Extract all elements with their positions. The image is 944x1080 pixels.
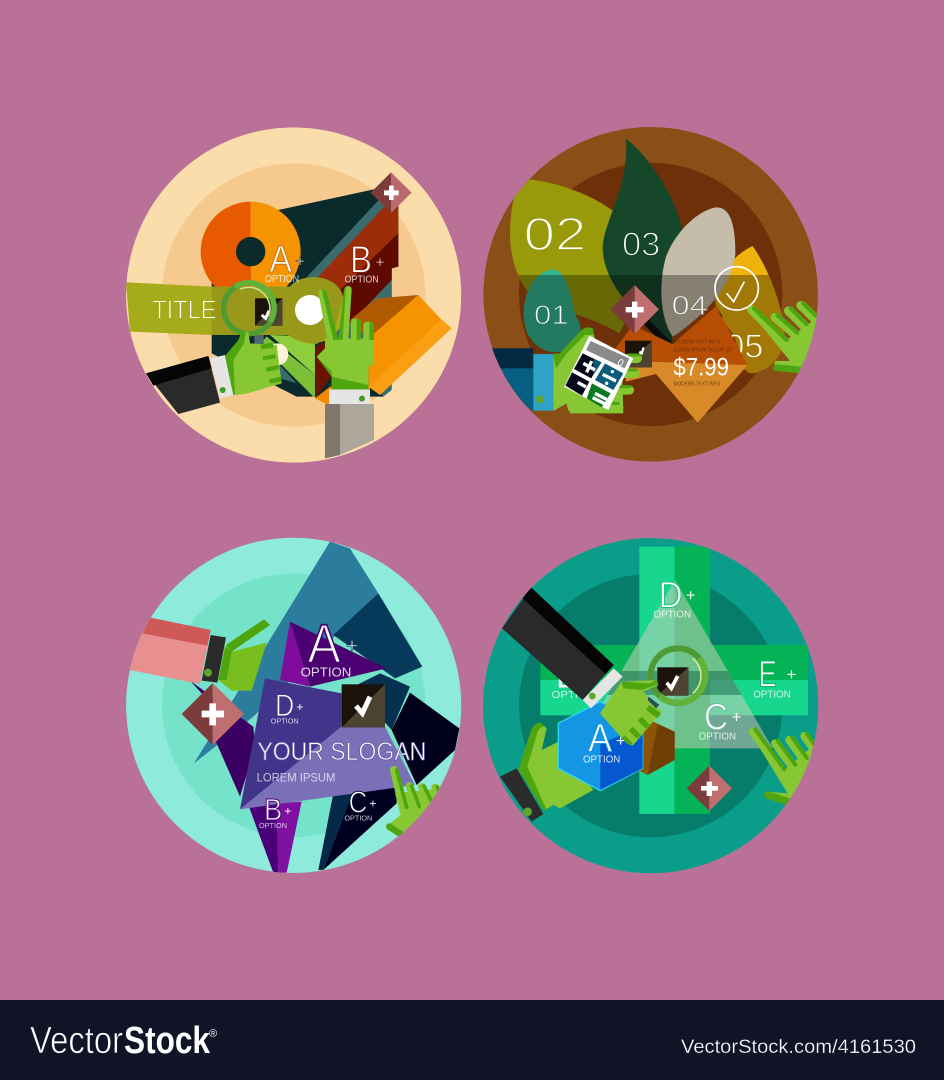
cross shape: [540, 547, 808, 814]
orange disc: [200, 202, 301, 287]
option text B: B: [350, 239, 372, 282]
check box: [255, 298, 282, 326]
left hand thumbs up: [146, 331, 282, 414]
option labels top: [654, 573, 695, 620]
price text: MODERN TEXT INFO: [674, 381, 721, 387]
option text B: +: [284, 804, 291, 818]
price text: LOREM IPSUM DOLOR SIT: [674, 347, 733, 353]
numbers: 02: [524, 208, 586, 260]
lorem text: LOREM IPSUM: [257, 770, 335, 784]
leaf 02: [510, 179, 630, 333]
option labels C: OPTION: [699, 732, 736, 743]
magnifier ring: [224, 283, 274, 346]
leaf 01: [524, 269, 581, 352]
blue hexagon: A: [588, 717, 612, 761]
option labels C: +: [732, 708, 741, 727]
option text A: OPTION: [301, 666, 351, 680]
numbers: 01: [534, 300, 569, 330]
option labels E: [753, 653, 796, 700]
option labels C: C: [704, 695, 728, 737]
plus diamond: [610, 285, 659, 334]
footer logo: Vector: [30, 1020, 123, 1062]
option text C: [344, 786, 376, 822]
title text: TITLE: [152, 294, 216, 324]
numbers: 03: [622, 226, 660, 263]
blue hexagon: OPTION: [583, 754, 620, 765]
option label B: OPTI: [551, 690, 578, 701]
dark banner shapes: [212, 188, 398, 397]
orange arrow: [315, 295, 452, 407]
option text A: A: [269, 238, 292, 281]
option text C: OPTION: [344, 813, 372, 822]
plus diamond: [687, 766, 732, 811]
option labels top: +: [686, 588, 695, 605]
lower left hand: [500, 722, 593, 822]
option text D: +: [296, 700, 303, 714]
option text A: OPTION: [265, 274, 299, 285]
translucent triangle: [576, 580, 773, 748]
option text A: [265, 245, 304, 282]
blue hexagon: +: [616, 733, 625, 750]
leaf 05: [715, 246, 784, 373]
option labels C: [699, 695, 741, 743]
option text D: D: [275, 687, 294, 723]
price text: MODERN TEXT INFO: [673, 339, 721, 345]
price diamond: [614, 306, 748, 423]
option labels E: +: [787, 665, 796, 684]
purple shapes: [190, 622, 387, 873]
top hand with suit: [502, 587, 662, 746]
option text D: OPTION: [271, 717, 299, 726]
check box: [625, 341, 652, 367]
option labels E: OPTION: [753, 689, 791, 700]
left hand pointing: [127, 618, 270, 691]
check box: [342, 684, 385, 727]
magnifier ring: [651, 648, 705, 703]
price text: $7.99: [673, 354, 729, 382]
footer url: VectorStock.com/4161530: [681, 1037, 916, 1058]
plus diamond: [371, 172, 412, 213]
option text B: +: [375, 254, 385, 271]
option labels E: E: [758, 653, 777, 695]
check circle: [715, 267, 758, 310]
dark band: [518, 275, 784, 374]
plus diamond: [182, 683, 244, 745]
option text A: +: [346, 635, 358, 658]
leaf 03: [603, 138, 683, 343]
option text C: C: [349, 786, 367, 820]
footer logo: [30, 1020, 217, 1062]
footer logo: Stock: [124, 1020, 211, 1062]
brown hexagon: [638, 718, 675, 775]
check box: [657, 667, 688, 696]
option text A: [301, 624, 357, 676]
footer bar: [0, 1000, 944, 1080]
left sleeve: [492, 348, 553, 412]
number 05: 05: [725, 328, 763, 365]
bottom navy shapes: [318, 787, 397, 870]
panel: slogan circle: [126, 538, 461, 873]
numbers: 04: [672, 290, 708, 320]
option text A: A: [307, 613, 341, 675]
option labels top: OPTION: [654, 609, 691, 620]
option text D: [271, 687, 303, 726]
option text B: OPTION: [345, 275, 379, 286]
footer logo: ®: [209, 1028, 217, 1040]
right hand peace sign: [317, 286, 374, 458]
option text B: [345, 246, 384, 282]
leaf 04: [661, 207, 735, 337]
blue hexagon: [558, 702, 643, 791]
main violet panel: [240, 678, 415, 809]
panel: title circle: [126, 127, 461, 463]
slogan text: YOUR SLOGAN: [257, 739, 426, 766]
option text B: OPTION: [259, 821, 287, 830]
green triangle: [260, 335, 315, 398]
option label B: B: [556, 658, 579, 695]
hand with calculator: [553, 327, 639, 413]
option labels top: D: [659, 573, 683, 615]
price text: [673, 339, 733, 387]
bottom right pointing hand: [389, 770, 448, 840]
olive band: [126, 277, 345, 344]
option text B: [259, 793, 291, 830]
hand with calculator: 0: [615, 357, 626, 370]
right pointing hand: [751, 729, 816, 805]
panel: cross circle: [483, 538, 818, 873]
white half circle: [272, 343, 288, 366]
panel: numbered leaves circle: [483, 127, 818, 462]
option text C: +: [369, 796, 376, 810]
blue origami shapes: [194, 542, 459, 785]
option text B: B: [264, 793, 282, 827]
numbers: [526, 218, 708, 324]
arrow notch shadow: [644, 306, 723, 344]
option text A: +: [295, 254, 305, 271]
right pointing hand: [750, 303, 818, 373]
